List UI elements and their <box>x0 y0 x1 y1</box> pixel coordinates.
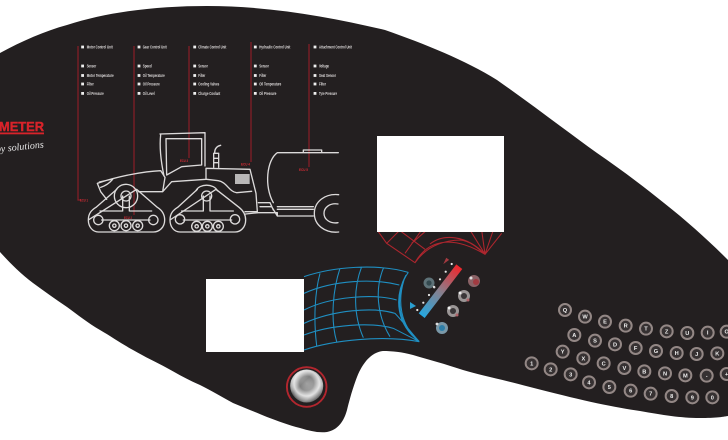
list: Attachment Control Unit: Filter <box>319 81 326 86</box>
tractor grille <box>235 174 250 184</box>
list: Motor Control Unit: Filter <box>87 81 94 86</box>
red mesh graphic <box>378 230 502 263</box>
button: recirculate <box>447 305 459 317</box>
letter keys row 2 <box>568 329 723 360</box>
letter keys row 2: D <box>613 342 617 348</box>
button: defrost <box>458 290 470 302</box>
temperature scale dots <box>416 263 453 311</box>
display cutout: lower screen <box>206 279 304 352</box>
trailer wheel <box>314 195 339 232</box>
front track <box>88 184 165 232</box>
list: Hydraulic Control Unit: Oil Temperature <box>259 81 282 86</box>
logo underline <box>0 132 44 134</box>
number keys: 3 <box>569 372 572 378</box>
letter keys row 3: B <box>642 369 646 375</box>
ECU callout labels on vehicle <box>80 159 308 220</box>
list: Motor Control Unit: Motor Control Unit <box>87 44 113 49</box>
vehicle line drawing: tractor with tank trailer <box>88 133 339 232</box>
letter keys row 1 <box>559 304 728 339</box>
label: attachment unit: ECU 5 <box>299 168 308 172</box>
tractor cab <box>160 133 205 176</box>
list: Gear Control Unit: Gear Control Unit <box>143 44 167 49</box>
letter keys row 3: V <box>622 366 626 372</box>
knob sheen <box>290 370 323 402</box>
list: Climate Control Unit: Sensor <box>198 63 208 68</box>
letter keys row 1: Z <box>665 329 669 335</box>
exhaust pipe <box>214 145 221 167</box>
letter keys row 3 <box>557 346 728 382</box>
letter keys row 3: - <box>706 374 708 380</box>
number keys <box>526 357 718 403</box>
letter keys row 3: X <box>581 356 585 362</box>
list: Motor Control Unit <box>81 44 114 96</box>
number keys: 4 <box>587 380 591 386</box>
number keys: 6 <box>629 389 632 395</box>
list: Hydraulic Control Unit <box>254 44 291 96</box>
temperature gradient bar <box>422 267 459 316</box>
number keys: 9 <box>691 395 694 401</box>
letter keys row 2: G <box>654 349 659 355</box>
number keys: 7 <box>649 392 652 398</box>
label: gear unit: ECU 2 <box>124 216 132 220</box>
letter keys row 2: F <box>634 346 638 352</box>
button: cooling <box>436 322 448 334</box>
temperature control <box>410 257 459 316</box>
label: climate unit: ECU 3 <box>180 159 188 163</box>
list: Gear Control Unit: Oil Temperature <box>143 73 165 78</box>
letter keys row 3: M <box>683 373 688 379</box>
letter keys row 1: E <box>603 320 607 326</box>
letter keys row 1: I <box>707 331 709 337</box>
list: Motor Control Unit: Motor Temperature <box>87 73 114 78</box>
list: Hydraulic Control Unit: Oil Pressure <box>259 91 277 96</box>
list: Hydraulic Control Unit: Sensor <box>259 63 269 68</box>
knob red ring <box>287 367 327 407</box>
display cutout: upper screen <box>377 136 504 232</box>
keyboard <box>526 304 728 403</box>
list: Climate Control Unit: Climate Control Unit <box>198 44 227 49</box>
drawbar <box>246 203 313 216</box>
blue mesh graphic <box>304 267 419 350</box>
label: hydraulic unit: ECU 4 <box>241 162 251 166</box>
letter keys row 3: N <box>663 371 667 377</box>
letter keys row 2: J <box>695 352 698 358</box>
letter keys row 2: S <box>593 339 597 345</box>
number keys: 8 <box>670 394 673 400</box>
logo: Meter by solutions <box>0 120 44 156</box>
letter keys row 2: A <box>572 333 576 339</box>
list: Gear Control Unit: Oil Pressure <box>143 81 160 86</box>
number keys: 1 <box>530 361 533 367</box>
letter keys row 2: K <box>715 351 720 357</box>
list: Gear Control Unit <box>138 44 167 96</box>
list: Attachment Control Unit: Seat Sensor <box>319 73 336 78</box>
list: Climate Control Unit: Cooling Valves <box>198 81 220 86</box>
letter keys row 1: T <box>644 327 648 333</box>
list: Motor Control Unit: Oil Pressure <box>87 91 104 96</box>
cooler arrow <box>410 302 416 309</box>
list: Attachment Control Unit: Attachment Control Unit <box>319 44 352 49</box>
letter keys row 3: C <box>602 361 606 367</box>
logo wordmark: METER <box>0 120 44 134</box>
list: Gear Control Unit: Speed <box>143 63 152 68</box>
list: Climate Control Unit: Charge Coolant <box>198 91 221 96</box>
label: motor unit: ECU 1 <box>80 198 88 202</box>
button: heat <box>468 275 480 287</box>
list: Hydraulic Control Unit: Filter <box>259 73 267 78</box>
list: Attachment Control Unit <box>314 44 352 96</box>
climate buttons <box>424 275 480 334</box>
rear track <box>170 185 246 232</box>
letter keys row 1: U <box>685 331 689 337</box>
list: Attachment Control Unit: Voltage <box>319 63 329 68</box>
letter keys row 1: Q <box>563 308 568 314</box>
list: Climate Control Unit <box>193 44 227 96</box>
letter keys row 3: Y <box>561 350 565 356</box>
number keys: 2 <box>549 367 552 373</box>
list: Motor Control Unit: Sensor <box>87 63 96 68</box>
letter keys row 1: W <box>582 315 588 321</box>
list: Hydraulic Control Unit: Hydraulic Control Unit <box>259 44 291 49</box>
rotary knob <box>287 367 327 407</box>
tractor hood and body <box>97 168 257 212</box>
list: Attachment Control Unit: Tyre Pressure <box>319 91 337 96</box>
knob metal cap <box>290 370 323 402</box>
list: Climate Control Unit: Filter <box>198 73 206 78</box>
letter keys row 2: H <box>675 351 679 357</box>
number keys: 0 <box>711 395 714 401</box>
warmer arrow <box>442 257 450 264</box>
callout lines from control unit lists to vehicle <box>78 42 309 215</box>
tank trailer <box>268 150 338 203</box>
button: fan <box>424 278 435 288</box>
letter keys row 1: R <box>624 324 628 330</box>
number keys: 5 <box>608 385 611 391</box>
list: Gear Control Unit: Oil Level <box>143 91 155 96</box>
